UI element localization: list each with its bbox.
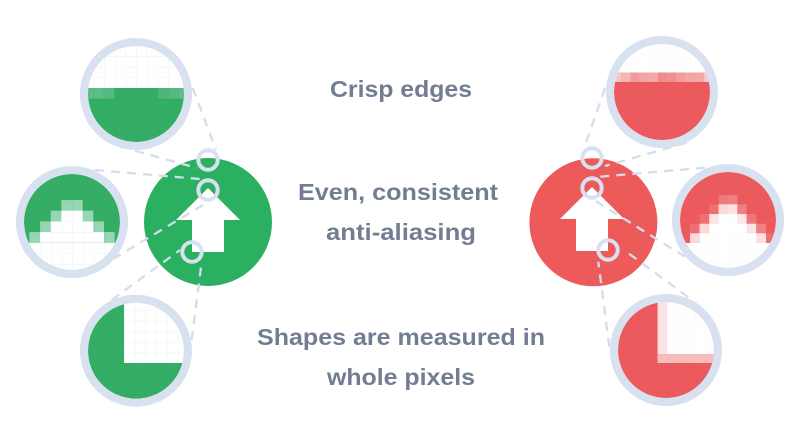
red icon: circle with up arrow [529,158,657,286]
label: shapes are measured in whole pixels: Shapes are measured in [257,324,545,350]
dashed connectors: red side [584,88,705,347]
magnifier: green inner corner [84,298,188,403]
magnifier: red blurry arrow tip [676,168,780,273]
small rings: green icon [182,150,218,262]
dashed connectors: green side [95,88,216,340]
magnifier: green arrow tip [20,170,124,275]
label: shapes are measured in whole pixels: whole pixels [326,364,475,390]
label: even, consistent anti-aliasing [298,179,498,245]
label: shapes are measured in whole pixels [257,324,545,390]
label: crisp edges: Crisp edges [330,76,472,102]
label: even, consistent anti-aliasing: anti-aliasing [326,219,476,245]
magnifier: red blurry inner corner [614,298,718,402]
small rings: red icon [582,148,618,260]
label: even, consistent anti-aliasing: Even, consistent [298,179,498,205]
magnifier: red blurry top edge [610,40,714,144]
green icon: circle with up arrow [144,158,272,286]
magnifier: green crisp top edge [80,40,192,150]
